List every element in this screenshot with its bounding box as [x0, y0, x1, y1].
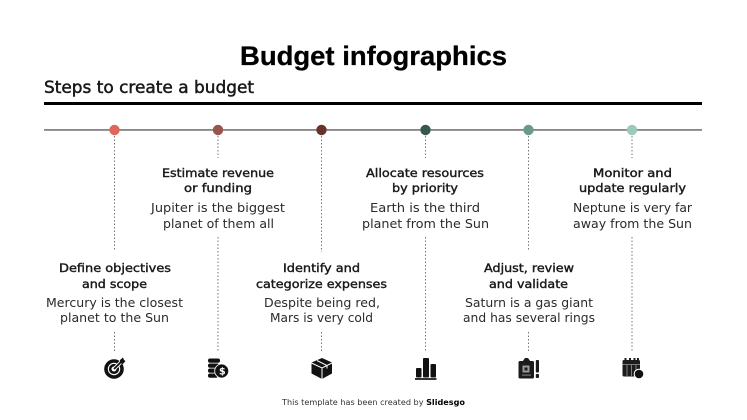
step 4 text [362, 166, 489, 231]
step 6 text: Monitor and [593, 166, 672, 180]
step 3 text: Despite being red, [264, 296, 380, 310]
icon: clipboard with exclamation [518, 358, 539, 378]
step 6 text [573, 166, 692, 231]
step 5 text [463, 261, 595, 325]
step 3 text: Mars is very cold [270, 311, 373, 325]
step 5 text: and has several rings [463, 311, 595, 325]
step 1 text: Define objectives [59, 261, 171, 275]
step 4 text: by priority [392, 181, 458, 195]
step 4 text: Earth is the third [370, 201, 480, 215]
step 3 text: Identify and [283, 261, 360, 275]
step 4 text: Allocate resources [366, 166, 484, 180]
icon: coins [208, 358, 229, 378]
timeline dot 2 [213, 125, 223, 135]
timeline dot 6 [627, 125, 637, 135]
step 1 text: planet to the Sun [60, 311, 169, 325]
step 1 text [46, 261, 183, 325]
step 2 text: Estimate revenue [162, 166, 274, 180]
step 6 text: update regularly [579, 181, 686, 195]
timeline dot 4 [420, 125, 431, 135]
title: Budget infographics [240, 41, 507, 71]
step 2 text: Jupiter is the biggest [150, 201, 285, 215]
step 5 text: and validate [489, 277, 568, 291]
subtitle: Steps to create a budget [44, 78, 255, 97]
step 6 text: away from the Sun [573, 217, 692, 231]
step 2 text [150, 166, 285, 231]
step 4 text: planet from the Sun [362, 217, 489, 231]
step 6 text: Neptune is very far [573, 201, 692, 215]
timeline dot 3 [316, 125, 327, 135]
step 3 text: categorize expenses [256, 277, 387, 291]
footer credit: This template has been created by Slidesgo [281, 398, 465, 407]
step 5 text: Adjust, review [484, 261, 574, 275]
icon: bar chart [415, 358, 436, 380]
step 5 text: Saturn is a gas giant [465, 296, 593, 310]
timeline [44, 125, 702, 135]
step 2 text: or funding [184, 181, 252, 195]
heading rule [44, 102, 702, 105]
icon: target [106, 358, 126, 377]
step 1 text: Mercury is the closest [46, 296, 183, 310]
step 2 text: planet of them all [163, 217, 274, 231]
step 3 text [256, 261, 387, 325]
icon: coins: $ [219, 366, 226, 378]
timeline dot 5 [523, 125, 534, 135]
icon: calendar with clock [622, 358, 644, 379]
step 1 text: and scope [82, 277, 147, 291]
icon: box [312, 358, 332, 379]
connector lines [114, 136, 632, 352]
timeline dot 1 [109, 125, 120, 135]
